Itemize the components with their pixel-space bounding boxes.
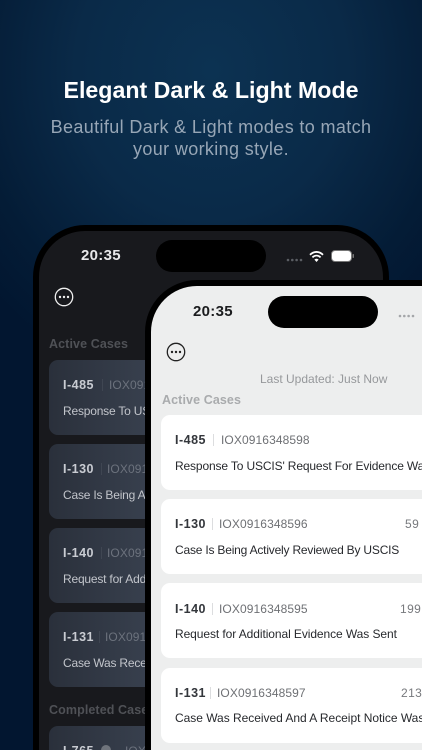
dark card I-131 — [49, 612, 349, 687]
dark card I-140: Request for Additional — [63, 572, 176, 586]
light card I-131: 213 — [401, 686, 422, 700]
dark card I-131: Case Was Received And — [63, 656, 191, 670]
light card I-130: IOX0916348596 — [219, 517, 308, 531]
subtitle — [51, 117, 371, 159]
heading: light active cases: Active Cases — [162, 393, 241, 407]
dark status time: 20:35 — [81, 247, 121, 264]
dark card I-485: I-485 — [63, 378, 94, 392]
heading: dark completed cases: Completed Cases — [49, 703, 155, 717]
light card I-140: 199 — [400, 602, 421, 616]
dark card I-130: Case Is Being Actively — [63, 488, 177, 502]
dark card I-130: I-130 — [63, 462, 94, 476]
icon: battery — [331, 250, 354, 262]
light card I-485: I-485 — [175, 433, 206, 447]
light card I-131 — [161, 668, 422, 743]
dark card I-140: I-140 — [63, 546, 94, 560]
light signal dots — [398, 314, 414, 318]
light card I-140 — [161, 583, 422, 658]
light card I-130: 59 — [405, 517, 419, 531]
subtitle: your working style. — [133, 138, 289, 158]
light card I-130: Case Is Being Actively Reviewed By USCIS — [175, 543, 399, 557]
title: Elegant Dark & Light Mode — [63, 77, 359, 103]
light card I-131: IOX0916348597 — [217, 686, 306, 700]
dark card I-140: IOX0916348595 — [107, 546, 196, 560]
dark card I-765 — [49, 726, 349, 750]
dark card I-485: IOX0916348598 — [109, 378, 198, 392]
last updated text: Last Updated: Just Now — [260, 372, 387, 386]
light card I-140: IOX0916348595 — [219, 602, 308, 616]
dark card I-140 — [49, 528, 349, 603]
dark card I-130 — [49, 444, 349, 519]
panel: dark phone — [33, 225, 389, 750]
dark card I-131: I-131 — [63, 630, 94, 644]
light card I-485: IOX0916348598 — [221, 433, 310, 447]
dark card I-485 — [49, 360, 349, 435]
light card I-130: I-130 — [175, 517, 206, 531]
light card I-485 — [161, 415, 422, 490]
dark card I-131: IOX0916348597 — [105, 630, 194, 644]
panel: light phone — [145, 280, 422, 750]
heading: dark active cases: Active Cases — [49, 337, 128, 351]
subtitle: Beautiful Dark & Light modes to match — [51, 117, 371, 137]
dark dynamic island — [156, 240, 266, 272]
light card I-131: I-131 — [175, 686, 206, 700]
dark card I-485: Response To USCIS' Request — [63, 404, 218, 418]
light card I-130 — [161, 499, 422, 574]
dark signal dots — [286, 258, 302, 262]
light status time: 20:35 — [193, 303, 233, 320]
light card I-140: I-140 — [175, 602, 206, 616]
icon: wifi — [309, 251, 324, 262]
dark card I-130: IOX0916348596 — [107, 462, 196, 476]
light dynamic island — [268, 296, 378, 328]
icon: dark menu — [54, 288, 74, 306]
icon: light menu — [166, 342, 186, 362]
light card I-140: Request for Additional Evidence Was Sent — [175, 627, 397, 641]
